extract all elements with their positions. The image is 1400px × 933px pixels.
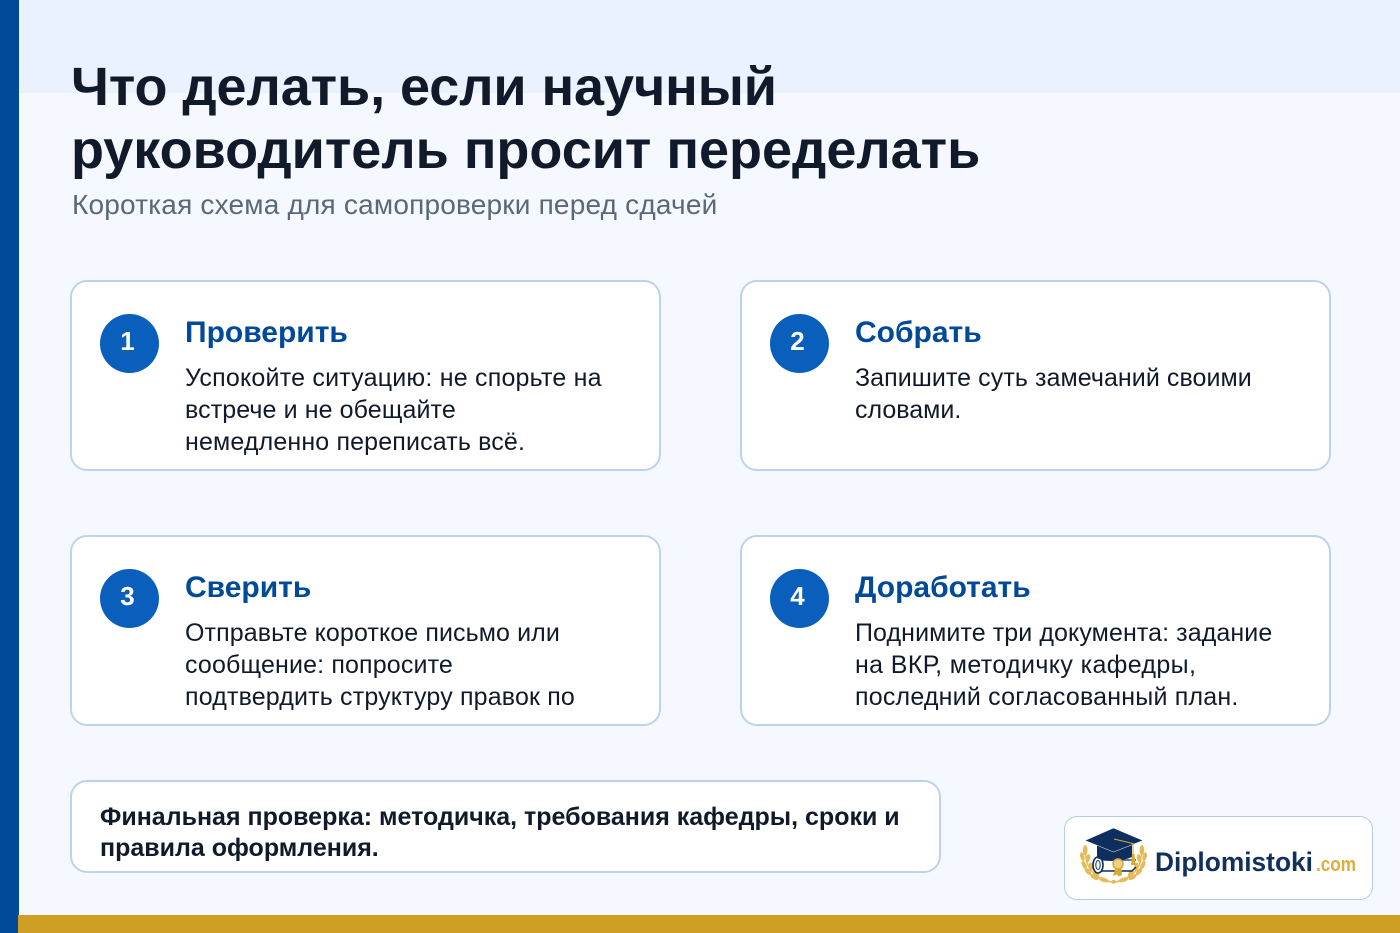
step 2 text: словами.	[855, 396, 961, 424]
step 4 text	[855, 619, 1272, 711]
step 4 heading: Доработать	[855, 571, 1031, 604]
icon: diploma scroll	[1093, 857, 1136, 873]
logo wordmark: Diplomistoki	[1155, 847, 1313, 877]
icon: graduation cap	[1085, 828, 1143, 865]
step 4 text: последний согласованный план.	[855, 683, 1239, 711]
panel: step 3	[70, 535, 661, 726]
bottom gold bar	[18, 915, 1400, 933]
step number 1	[100, 314, 159, 373]
panel: final check callout	[70, 780, 941, 873]
step 3 text: сообщение: попросите	[185, 651, 453, 679]
subtitle: Короткая схема для самопроверки перед сдачей	[72, 189, 717, 220]
step 4 text: Поднимите три документа: задание	[855, 619, 1272, 647]
step 1 text: немедленно переписать всё.	[185, 428, 525, 456]
step number 1: 1	[120, 326, 135, 356]
logo panel	[1064, 816, 1373, 900]
step number 2	[770, 314, 829, 373]
final check text	[100, 803, 900, 862]
step 1 heading: Проверить	[185, 316, 348, 349]
step 1 text: встрече и не обещайте	[185, 396, 456, 424]
step 2 text: Запишите суть замечаний своими	[855, 364, 1252, 392]
step number 3: 3	[120, 581, 135, 611]
step number 3	[100, 569, 159, 628]
title: руководитель просит переделать	[71, 120, 980, 180]
final check text: правила оформления.	[100, 834, 379, 862]
icon: diploma seal	[1113, 859, 1123, 876]
step 3 text	[185, 619, 575, 711]
top header band	[19, 0, 1400, 93]
step 3 text: Отправьте короткое письмо или	[185, 619, 560, 647]
panel: step 4	[740, 535, 1331, 726]
logo: graduation cap, diploma, laurel and wordmark	[1080, 828, 1356, 884]
step 2 text	[855, 364, 1252, 424]
left accent bar	[0, 0, 19, 933]
step 4 text: на ВКР, методичку кафедры,	[855, 651, 1196, 679]
step 2 heading: Собрать	[855, 316, 982, 349]
panel: step 2	[740, 280, 1331, 471]
step number 4	[770, 569, 829, 628]
panel: step 1	[70, 280, 661, 471]
step 1 text	[185, 364, 602, 456]
step 3 heading: Сверить	[185, 571, 311, 604]
step number 4: 4	[790, 581, 805, 611]
logo domain: .com	[1316, 854, 1356, 876]
final check text: Финальная проверка: методичка, требования кафедры, сроки и	[100, 803, 900, 831]
step 3 text: подтвердить структуру правок по	[185, 683, 575, 711]
title	[71, 57, 980, 180]
title: Что делать, если научный	[71, 57, 777, 117]
step number 2: 2	[790, 326, 805, 356]
step 1 text: Успокойте ситуацию: не спорьте на	[185, 364, 602, 392]
icon: laurel wreath	[1079, 845, 1148, 884]
